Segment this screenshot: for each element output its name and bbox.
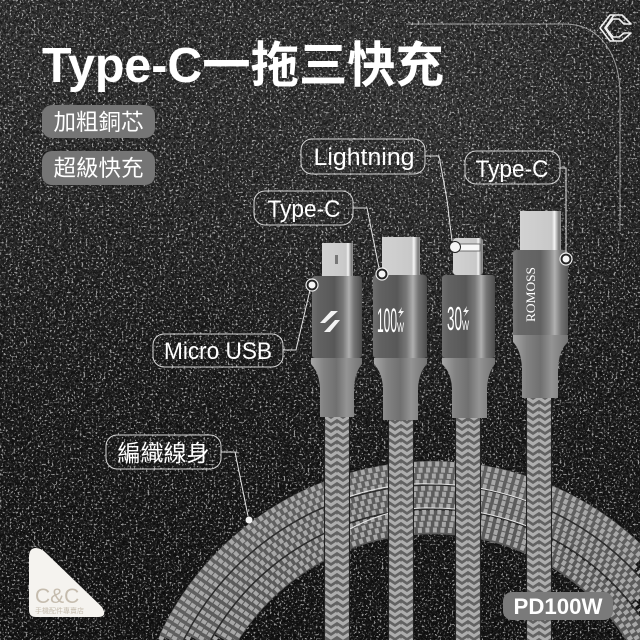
strain relief boot 2 <box>374 358 427 420</box>
cable 3: Lightning: 30 <box>447 300 462 337</box>
badge: C&C store <box>29 548 104 617</box>
callout: Type-C right <box>465 151 572 265</box>
Type-C plug 4 <box>520 211 561 250</box>
pill: super fast charging <box>42 151 155 185</box>
callout: Type-C left: Type-C <box>268 196 340 223</box>
metal collar 1 <box>312 276 362 358</box>
cable 3: Lightning <box>442 238 495 640</box>
metal collar 3 <box>442 275 495 358</box>
strain relief boot 3 <box>442 358 495 418</box>
100W suffix: W <box>397 319 404 335</box>
callout: Type-C right: Type-C <box>476 156 548 183</box>
pill: thick copper core <box>42 105 155 138</box>
cable 2: Type-C 100W <box>373 237 427 640</box>
Lightning contacts <box>456 244 480 251</box>
callout: Lightning <box>301 139 460 252</box>
small bolt 100W <box>398 307 404 318</box>
badge: C&C store: 手機配件專賣店 <box>35 606 84 615</box>
strain relief boot 1 <box>311 358 362 417</box>
small bolt 30W <box>463 306 469 317</box>
callout: braided cable body <box>106 435 252 524</box>
pill: super fast charging: 超級快充 <box>53 156 144 181</box>
braided cord 3 <box>455 415 481 640</box>
Type-C plug 2 <box>382 237 420 275</box>
icon: hexagonal C logo <box>600 15 631 41</box>
cable 2: Type-C 100W: 100 <box>377 302 397 340</box>
cable 4: Type-C ROMOSS <box>513 211 568 640</box>
callout: Lightning: Lightning <box>314 144 414 171</box>
cable 1: Micro USB <box>311 243 362 640</box>
badge: PD100W: PD100W <box>514 594 603 619</box>
title: Type-C一拖三快充 <box>42 39 444 93</box>
Lightning plug <box>453 238 483 275</box>
icon: lightning bolt <box>320 311 340 332</box>
callout: Micro USB <box>153 279 318 367</box>
callout: Type-C left <box>254 191 388 280</box>
metal collar 4 <box>513 250 568 336</box>
callout: Micro USB: Micro USB <box>164 338 272 365</box>
micro USB plug <box>322 243 353 277</box>
metal collar 2 <box>373 275 427 358</box>
braided cord 1 <box>324 410 350 640</box>
frame line at top right <box>406 24 620 231</box>
coiled braided cable <box>160 464 640 640</box>
braided cord 4 <box>526 398 552 640</box>
ROMOSS brand: ROMOSS <box>524 267 538 322</box>
badge: C&C store: C&C <box>35 585 79 608</box>
strain relief boot 4 <box>513 335 568 398</box>
30W suffix: W <box>462 317 469 333</box>
pill: thick copper core: 加粗銅芯 <box>53 110 144 135</box>
braided cord 2 <box>388 415 414 640</box>
callout: braided cable body: 編織線身 <box>118 440 210 466</box>
